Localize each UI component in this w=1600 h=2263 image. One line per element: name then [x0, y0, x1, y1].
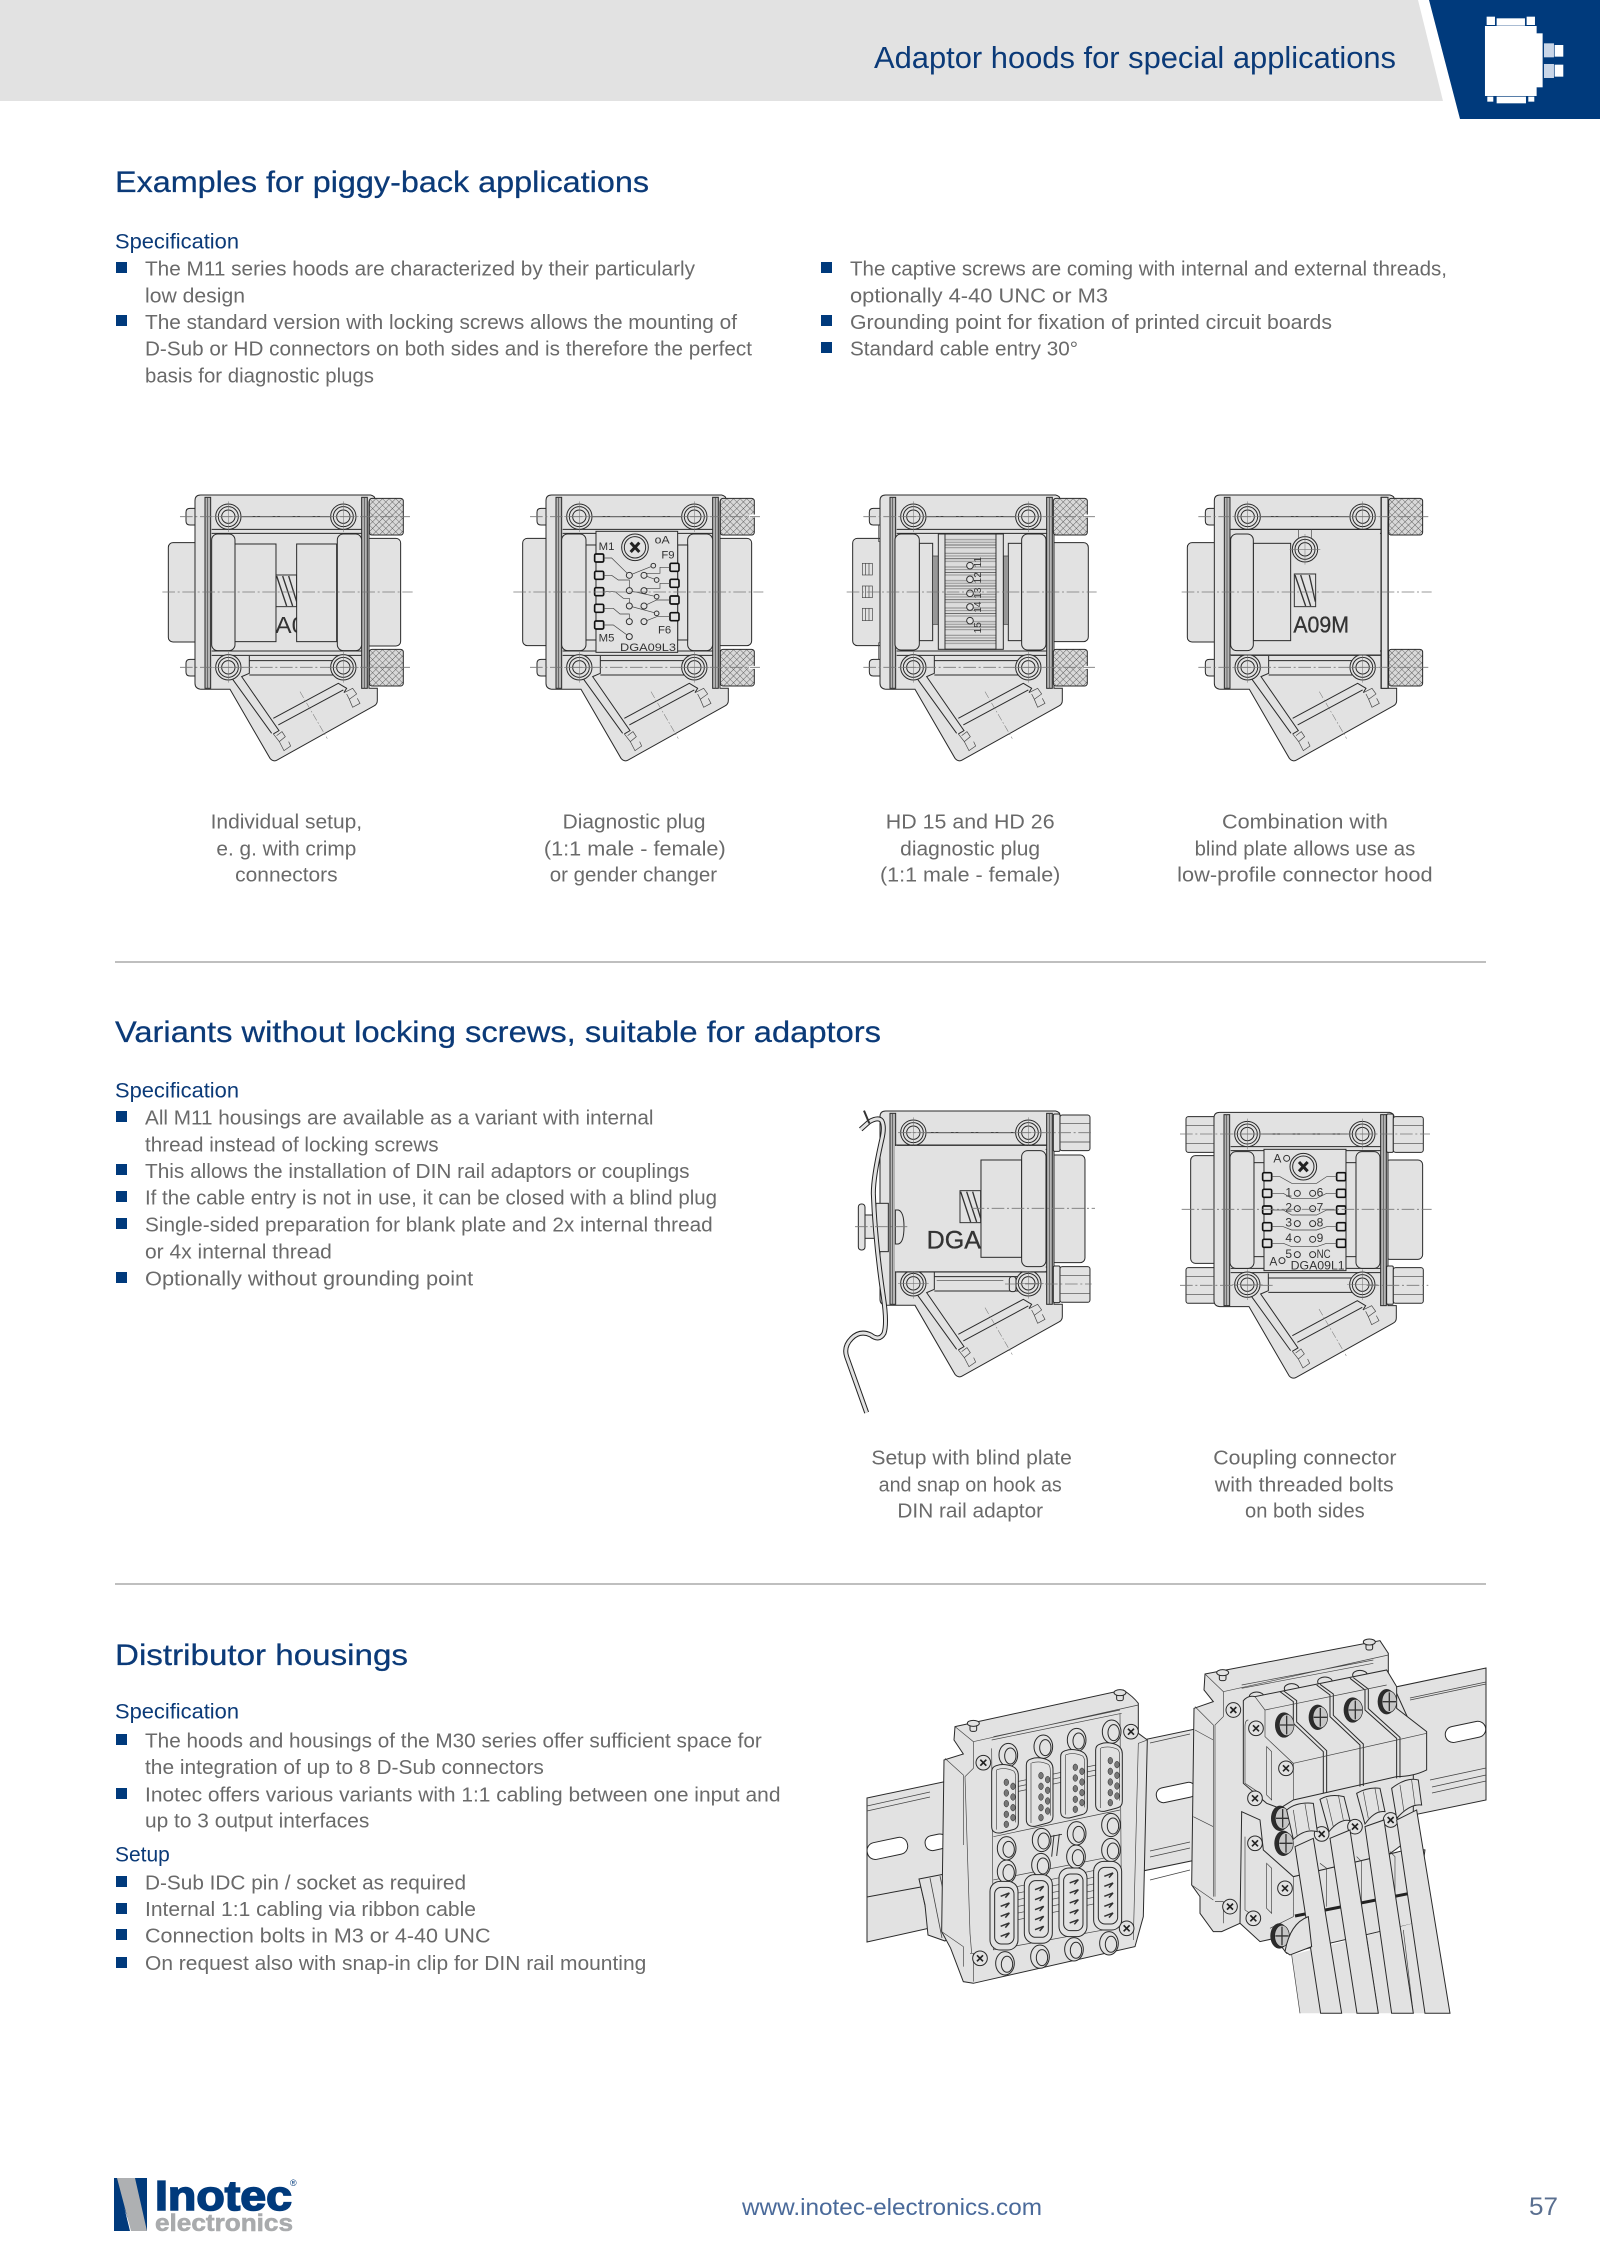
- bullet list left: The standard version with locking screws allows the mounting of: [145, 311, 737, 334]
- drawing: coupling connector: 9: [1317, 1231, 1324, 1245]
- drawing: coupling connector: DGA09L1: [1291, 1258, 1345, 1272]
- caption: individual setup: connectors: [235, 863, 338, 886]
- bullet list: If the cable entry is not in use, it can be closed with a blind plug: [145, 1186, 717, 1209]
- bullet list: specification: Inotec offers various variants with 1:1 cabling between one input and: [145, 1783, 780, 1806]
- bullet list: setup: [116, 1871, 646, 1975]
- caption: diagnostic plug: (1:1 male - female): [544, 837, 726, 860]
- bullet list left: D-Sub or HD connectors on both sides and is therefore the perfect: [145, 337, 752, 360]
- left housing: [942, 1690, 1147, 1983]
- drawing: hood diagnostic plug: M1: [599, 541, 614, 553]
- bullet list left: low design: [145, 284, 245, 307]
- drawing: blind plate with snap-on hook: DGA0: [927, 1226, 995, 1254]
- left cable with gland: [867, 1873, 965, 1942]
- caption: coupling connector: with threaded bolts: [1214, 1473, 1394, 1496]
- upper hoods: [1243, 1670, 1427, 1808]
- bullet list left: [116, 257, 752, 387]
- drawing: coupling connector: A: [1273, 1152, 1281, 1166]
- caption: diagnostic plug: [544, 810, 726, 886]
- drawing: HD diagnostic plug: 11: [973, 557, 984, 567]
- caption: diagnostic plug: Diagnostic plug: [563, 810, 706, 833]
- drawing: blind plate with snap-on hook: [846, 1111, 1095, 1413]
- page number: 57: [1529, 2193, 1558, 2221]
- bullet list right: optionally 4-40 UNC or M3: [850, 284, 1108, 307]
- subheading: specification: Specification: [115, 1701, 239, 1724]
- drawing: coupling connector: 4: [1285, 1231, 1292, 1245]
- bullet list: setup: On request also with snap-in clip for DIN rail mounting: [145, 1952, 646, 1975]
- drawing: hood individual setup: [162, 495, 413, 761]
- caption: individual setup: Individual setup,: [211, 810, 362, 833]
- heading: piggy-back: Examples for piggy-back applications: [115, 166, 649, 199]
- caption: coupling connector: [1213, 1446, 1397, 1522]
- bullet list right: Grounding point for fixation of printed circuit boards: [850, 311, 1332, 334]
- heading: distributor housings: Distributor housings: [115, 1639, 408, 1672]
- drawing: HD diagnostic plug: 14: [973, 601, 984, 613]
- illustration: distributor housings on DIN rail: [866, 1639, 1487, 2013]
- bullet list: setup: Internal 1:1 cabling via ribbon cable: [145, 1898, 476, 1921]
- bullet list: specification: up to 3 output interfaces: [145, 1809, 369, 1832]
- footer logo: [114, 2172, 297, 2237]
- bullet list right: [821, 257, 1447, 360]
- drawing: coupling connector: 6: [1317, 1186, 1324, 1200]
- bullet list: specification: The hoods and housings of the M30 series offer sufficient space for: [145, 1729, 762, 1752]
- subheading: specification: Specification: [115, 231, 239, 254]
- heading: variants: Variants without locking screws, suitable for adaptors: [115, 1016, 881, 1049]
- header icon tab: [1429, 0, 1600, 119]
- cables: [1270, 1779, 1450, 2013]
- caption: HD diagnostic plug: HD 15 and HD 26: [886, 810, 1055, 833]
- caption: HD diagnostic plug: (1:1 male - female): [880, 863, 1060, 886]
- section: distributor housings: [115, 1639, 1487, 2013]
- footer logo: ®: [290, 2178, 297, 2188]
- footer logo: electronics: [155, 2210, 293, 2237]
- bullet list: All M11 housings are available as a variant with internal: [145, 1106, 654, 1129]
- drawing: hood diagnostic plug: F9: [661, 549, 675, 561]
- bullet list: specification: the integration of up to 8 D-Sub connectors: [145, 1756, 544, 1779]
- right housing with hoods and cables: [1192, 1639, 1450, 2013]
- drawing: combination with blind plate: A09M: [1293, 611, 1349, 637]
- bullet list left: The M11 series hoods are characterized by their particularly: [145, 257, 696, 280]
- drawing: coupling connector: 1: [1285, 1186, 1292, 1200]
- bullet list: Single-sided preparation for blank plate and 2x internal thread: [145, 1213, 713, 1236]
- caption: individual setup: e. g. with crimp: [216, 837, 356, 860]
- drawing: coupling connector: 7: [1317, 1200, 1324, 1214]
- header band: [0, 0, 1443, 101]
- logo wordmark: Inotec: [155, 2172, 292, 2219]
- drawing: coupling connector: 5: [1285, 1247, 1292, 1261]
- caption: coupling connector: on both sides: [1245, 1499, 1365, 1522]
- caption: combination: [1177, 810, 1433, 886]
- drawing: coupling connector: A: [1269, 1254, 1277, 1268]
- caption: setup with blind plate: DIN rail adaptor: [897, 1499, 1043, 1522]
- title: Adaptor hoods for special applications: [874, 40, 1396, 75]
- drawing: coupling connector: [1180, 1112, 1432, 1378]
- drawing: HD diagnostic plug: 15: [973, 622, 984, 633]
- drawing: HD diagnostic plug: [847, 495, 1097, 761]
- drawing: hood diagnostic plug: M5: [599, 633, 614, 645]
- icon: connector hood: [1485, 17, 1563, 103]
- bullet list: This allows the installation of DIN rail adaptors or couplings: [145, 1160, 690, 1183]
- drawing: HD diagnostic plug: 12: [973, 572, 984, 583]
- caption: combination: low-profile connector hood: [1177, 863, 1433, 886]
- bullet list: setup: Connection bolts in M3 or 4-40 UNC: [145, 1924, 491, 1947]
- drawing: coupling connector: 3: [1285, 1216, 1292, 1230]
- drawing: hood diagnostic plug: DGA09L3: [620, 642, 676, 654]
- drawing: hood diagnostic plug: [513, 495, 763, 761]
- logo mark: [114, 2178, 147, 2231]
- bullet list: thread instead of locking screws: [145, 1133, 439, 1156]
- bullet list: [116, 1106, 717, 1290]
- lower hoods: [1240, 1812, 1425, 1953]
- bullet list left: basis for diagnostic plugs: [145, 364, 374, 387]
- drawing: coupling connector: 2: [1285, 1200, 1292, 1214]
- bullet list right: The captive screws are coming with internal and external threads,: [850, 257, 1447, 280]
- drawing: HD diagnostic plug: 13: [973, 587, 984, 599]
- bullet list: specification: [116, 1729, 780, 1832]
- drawing: combination with blind plate: [1182, 495, 1432, 761]
- section: variants without locking screws: [115, 1016, 1432, 1522]
- bullet list: setup: D-Sub IDC pin / socket as required: [145, 1871, 466, 1894]
- caption: setup with blind plate: Setup with blind plate: [871, 1446, 1072, 1469]
- subheading: setup: Setup: [115, 1844, 170, 1867]
- caption: coupling connector: Coupling connector: [1213, 1446, 1397, 1469]
- caption: combination: Combination with: [1222, 810, 1388, 833]
- caption: diagnostic plug: or gender changer: [550, 863, 717, 886]
- drawing: hood individual setup: A0: [275, 612, 305, 638]
- caption: setup with blind plate: and snap on hook as: [879, 1473, 1062, 1496]
- bullet list: or 4x internal thread: [145, 1240, 332, 1263]
- caption: combination: blind plate allows use as: [1195, 837, 1415, 860]
- caption: setup with blind plate: [871, 1446, 1072, 1522]
- drawing: hood diagnostic plug: oA: [655, 535, 670, 547]
- drawing: hood diagnostic plug: F6: [658, 624, 671, 636]
- drawing: coupling connector: NC: [1317, 1247, 1331, 1261]
- caption: individual setup: [211, 810, 362, 886]
- DIN rail: [866, 1668, 1487, 1928]
- footer url: www.inotec-electronics.com: [741, 2194, 1042, 2220]
- drawing: coupling connector: 8: [1317, 1216, 1324, 1230]
- subheading: specification: Specification: [115, 1080, 239, 1103]
- bullet list: Optionally without grounding point: [145, 1267, 474, 1290]
- housing body: [1192, 1639, 1413, 1937]
- section: piggy-back applications: [115, 166, 1447, 886]
- caption: HD diagnostic plug: diagnostic plug: [900, 837, 1040, 860]
- bullet list right: Standard cable entry 30°: [850, 337, 1078, 360]
- caption: HD diagnostic plug: [880, 810, 1060, 886]
